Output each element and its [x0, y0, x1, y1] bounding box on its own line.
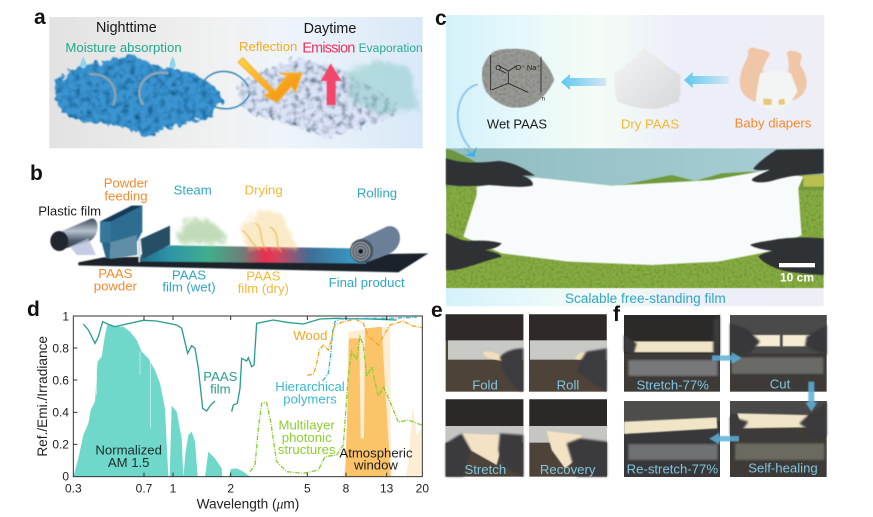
- wet PAAS label: Wet PAAS: [487, 116, 547, 131]
- photo captions: Cut: [770, 377, 791, 392]
- plastic film label: Plastic film: [38, 203, 101, 218]
- curved down arrow: [458, 84, 478, 148]
- panel d: spectra chart: structures: [278, 442, 336, 457]
- panel d: spectra chart: polymers: [283, 391, 337, 406]
- film on belt: [141, 245, 367, 264]
- cycle arrows: [202, 71, 250, 109]
- panel a: nighttime and daytime schematic: [49, 17, 423, 148]
- x axis tick labels: 5: [304, 481, 311, 495]
- nighttime title: Nighttime: [96, 20, 157, 36]
- panel b: roll-to-roll process: film (wet): [162, 280, 216, 295]
- emission arrow: [321, 63, 342, 105]
- final product label: Final product: [329, 275, 405, 290]
- x axis tick labels: 8: [343, 481, 350, 495]
- panel e label: e: [431, 299, 443, 322]
- drying vapour: [240, 212, 298, 248]
- dry PAAS label: Dry PAAS: [621, 116, 679, 131]
- x axis tick labels: [65, 481, 429, 495]
- panel c label: c: [435, 7, 447, 30]
- white porous film: [237, 58, 400, 139]
- PAAS film wet label: PAAS: [172, 267, 206, 282]
- panel b label: b: [30, 162, 43, 185]
- atmospheric window pale spikes: [343, 327, 422, 477]
- photo captions: Stretch-77%: [636, 377, 709, 392]
- x axis tick labels: 13: [380, 481, 394, 495]
- powder feeding label: Powder: [104, 176, 149, 191]
- panel b: roll-to-roll process: powder: [94, 278, 138, 293]
- y axis tick labels: 0.8: [52, 341, 69, 355]
- axes frame: [73, 316, 422, 477]
- atmospheric window label: Atmospheric: [339, 445, 413, 460]
- atmospheric window area: [345, 327, 391, 477]
- panel b: roll-to-roll process: feeding: [104, 188, 148, 203]
- panel d: spectra chart: film: [210, 382, 231, 397]
- white film: [463, 170, 803, 265]
- PAAS powder label: PAAS: [98, 266, 133, 281]
- y axis tick labels: 0.2: [52, 438, 69, 452]
- panel d: spectra chart: window: [353, 457, 398, 472]
- reflection label: Reflection: [239, 39, 297, 54]
- blue porous film: [53, 55, 223, 136]
- normalized AM 1.5 label: Normalized: [95, 443, 162, 458]
- photo captions: Roll: [557, 377, 579, 392]
- panel c: film photograph: 10 cm: [780, 271, 814, 285]
- y axis title: Ref./Emi./Irradiance: [35, 336, 50, 457]
- reflection arrow: [238, 58, 302, 102]
- y axis tick labels: 0.4: [52, 405, 69, 419]
- dry PAAS powder pile: [614, 48, 681, 109]
- y axis tick labels: [52, 309, 69, 484]
- re-stretch-77% photo: [624, 401, 720, 477]
- PAAS film curve: [83, 318, 397, 412]
- hierarchical polymers label: Hierarchical: [275, 379, 345, 394]
- photo captions: Fold: [472, 377, 498, 392]
- fold photo: [446, 314, 523, 392]
- wet PAAS pile with molecular structure: O⁻ Na⁺: [515, 63, 540, 72]
- flow arrows: [561, 74, 606, 90]
- conveyor platform: [78, 253, 428, 272]
- panel d: spectra chart: [35, 309, 429, 511]
- panel b: roll-to-roll process: film (dry): [238, 281, 289, 296]
- roll photo: [529, 314, 607, 392]
- x axis tick labels: 1: [170, 481, 177, 495]
- evaporation label: Evaporation: [359, 41, 423, 55]
- panel d: spectra chart: photonic: [282, 430, 332, 445]
- emission label: Emission: [302, 40, 355, 56]
- PAAS film label: PAAS: [203, 369, 238, 384]
- panel c: diaper recycling flow: [446, 15, 824, 148]
- wet PAAS pile with molecular structure: O: [495, 63, 501, 72]
- baby with diaper: [740, 47, 807, 110]
- photo captions: Self-healing: [748, 461, 818, 476]
- y axis tick labels: 1: [62, 309, 69, 323]
- x axis tick labels: 2: [227, 481, 234, 495]
- panel f label: f: [613, 303, 621, 326]
- step arrows: [709, 352, 817, 445]
- panel b: roll-to-roll process: [38, 176, 428, 296]
- photo captions: Stretch: [464, 462, 506, 477]
- wood label: Wood: [293, 328, 327, 343]
- cut photo: [730, 315, 827, 392]
- AM 1.5 irradiance area: [73, 325, 250, 477]
- evaporation haze: [347, 60, 418, 115]
- self-healing photo: [730, 401, 827, 477]
- panel a label: a: [34, 6, 46, 29]
- rolling label: Rolling: [357, 186, 397, 201]
- photo captions: Recovery: [540, 462, 596, 477]
- multilayer photonic structures label: Multilayer: [279, 418, 335, 433]
- powder hopper: [100, 206, 170, 262]
- y axis tick labels: 0.6: [52, 373, 69, 387]
- steam label: Steam: [174, 183, 212, 198]
- panel c: film photograph: [446, 145, 824, 306]
- stretch-77% photo: [624, 315, 720, 392]
- moisture absorption label: Moisture absorption: [65, 40, 182, 55]
- steam cloud: [177, 218, 227, 244]
- recovery photo: [529, 399, 607, 477]
- x axis tick labels: 0.3: [65, 481, 82, 495]
- daytime title: Daytime: [304, 21, 356, 37]
- final product roll: [350, 226, 400, 263]
- photo captions: [464, 377, 818, 477]
- PAAS film dry label: PAAS: [246, 268, 281, 283]
- scale bar: [779, 263, 815, 267]
- wet PAAS pile with molecular structure: n: [542, 97, 545, 103]
- y axis tick labels: 0: [62, 470, 69, 484]
- photo captions: Re-stretch-77%: [627, 461, 718, 476]
- baby diapers label: Baby diapers: [735, 115, 812, 130]
- x axis title: Wavelength (μm): [197, 496, 299, 511]
- multilayer photonic curve: [250, 337, 422, 473]
- panel d label: d: [27, 298, 40, 321]
- moisture curved arrows: [89, 73, 168, 106]
- gloved hands: [446, 149, 824, 275]
- wood curve: [307, 319, 422, 375]
- wet PAAS pile with molecular structure: [482, 49, 554, 108]
- panel c: film photograph: Scalable free-standing film: [565, 291, 726, 306]
- drying label: Drying: [245, 183, 283, 198]
- panel d: spectra chart: AM 1.5: [108, 455, 150, 470]
- panels e and f: photographs: [446, 314, 827, 477]
- arrow head: [462, 145, 477, 157]
- x axis tick labels: 0.7: [136, 481, 153, 495]
- caption strip: [446, 288, 824, 306]
- water drops: [80, 57, 176, 68]
- stretch photo: [446, 399, 523, 477]
- hierarchical polymers curve: [323, 317, 417, 381]
- x axis tick labels: 20: [416, 481, 429, 495]
- plastic film roller: [50, 218, 98, 255]
